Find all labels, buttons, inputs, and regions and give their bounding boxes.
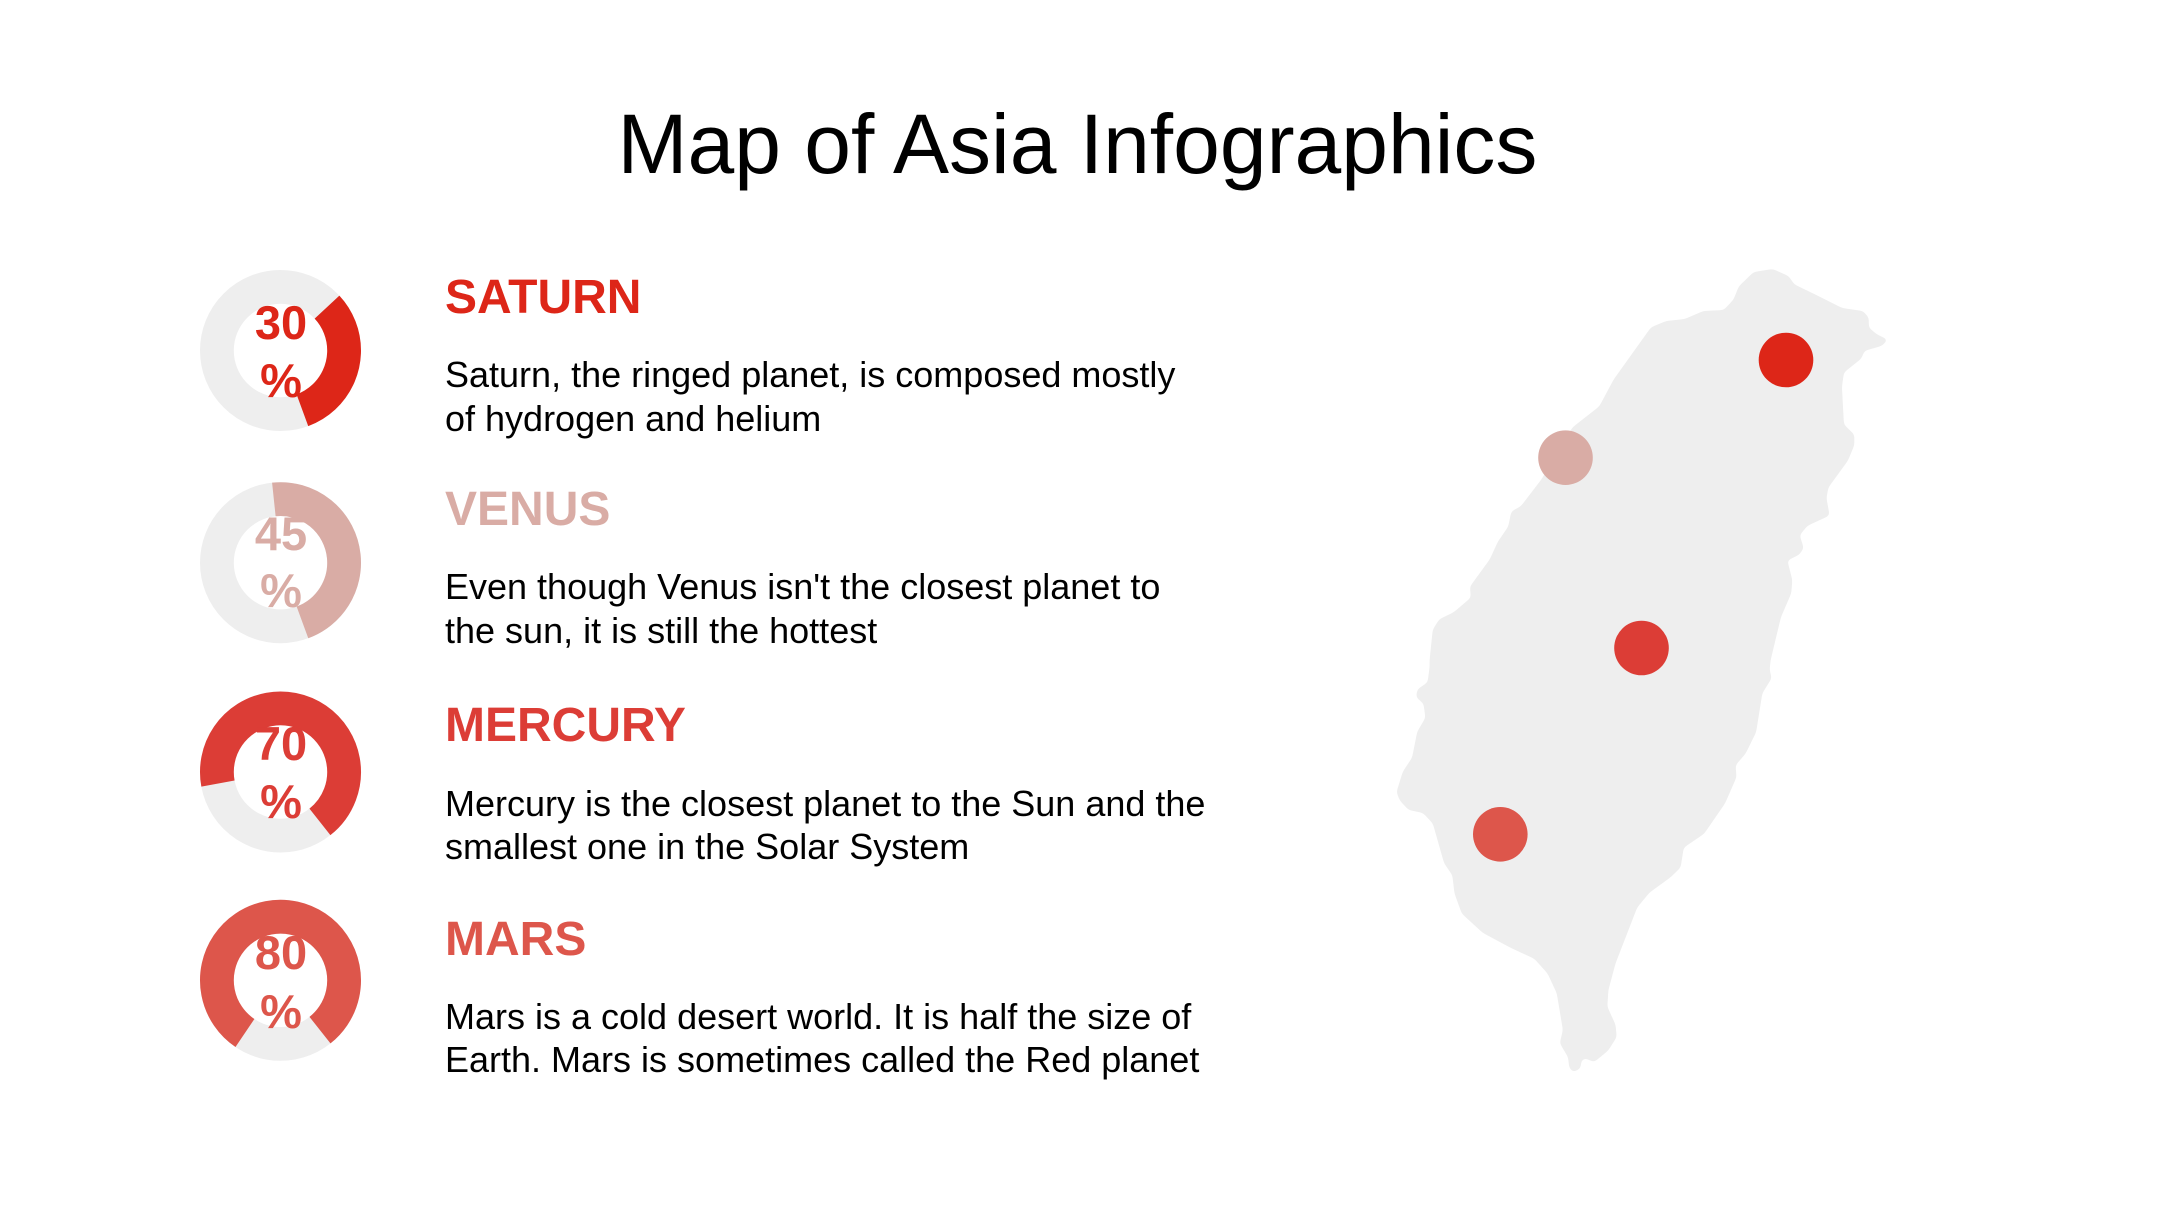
marker: Mars xyxy=(1473,807,1528,862)
donut chart: Saturn 30%: % xyxy=(260,354,302,407)
text: Mars description: Mars is a cold desert world. It is half the size of xyxy=(445,996,1192,1037)
marker: Mercury xyxy=(1614,621,1669,675)
donut chart: Venus 45%: 45 xyxy=(255,507,307,560)
panel: Mercury xyxy=(206,698,1205,867)
marker: Saturn xyxy=(1759,333,1813,387)
text: Mercury description: smallest one in the Solar System xyxy=(445,826,969,867)
panel: Saturn xyxy=(191,261,1175,440)
text: Mercury description: Mercury is the closest planet to the Sun and the xyxy=(445,783,1205,824)
donut chart: Mercury 70%: % xyxy=(260,775,302,828)
title: Map of Asia Infographics xyxy=(618,97,1537,191)
panel: Mars xyxy=(192,892,1199,1080)
donut chart: Mercury 70%: 70 xyxy=(255,717,307,770)
heading: Venus: VENUS xyxy=(445,483,610,536)
donut chart: Mars 80%: 80 xyxy=(255,926,307,979)
heading: Saturn: SATURN xyxy=(445,271,641,324)
donut chart: Venus 45%: % xyxy=(260,564,302,617)
text: Mars description: Earth. Mars is sometimes called the Red planet xyxy=(445,1039,1199,1080)
marker: Venus xyxy=(1538,430,1593,485)
heading: Mercury: MERCURY xyxy=(445,699,686,752)
donut chart: Saturn 30%: 30 xyxy=(255,296,307,349)
text: Venus description: the sun, it is still the hottest xyxy=(445,610,877,651)
donut chart: Venus 45% xyxy=(211,493,350,633)
text: Saturn description: of hydrogen and helium xyxy=(445,398,821,439)
panel: Venus xyxy=(211,483,1160,651)
donut chart: Mars 80%: % xyxy=(260,985,302,1038)
map silhouette xyxy=(1398,270,1886,1071)
donut chart: Mars 80% xyxy=(192,892,369,1069)
text: Saturn description: Saturn, the ringed planet, is composed mostly xyxy=(445,354,1175,395)
map with location markers xyxy=(1398,270,1886,1071)
text: Venus description: Even though Venus isn't the closest planet to xyxy=(445,566,1160,607)
donut chart: Mercury 70% xyxy=(206,698,355,846)
heading: Mars: MARS xyxy=(445,913,586,966)
donut chart: Saturn 30% xyxy=(191,261,370,440)
